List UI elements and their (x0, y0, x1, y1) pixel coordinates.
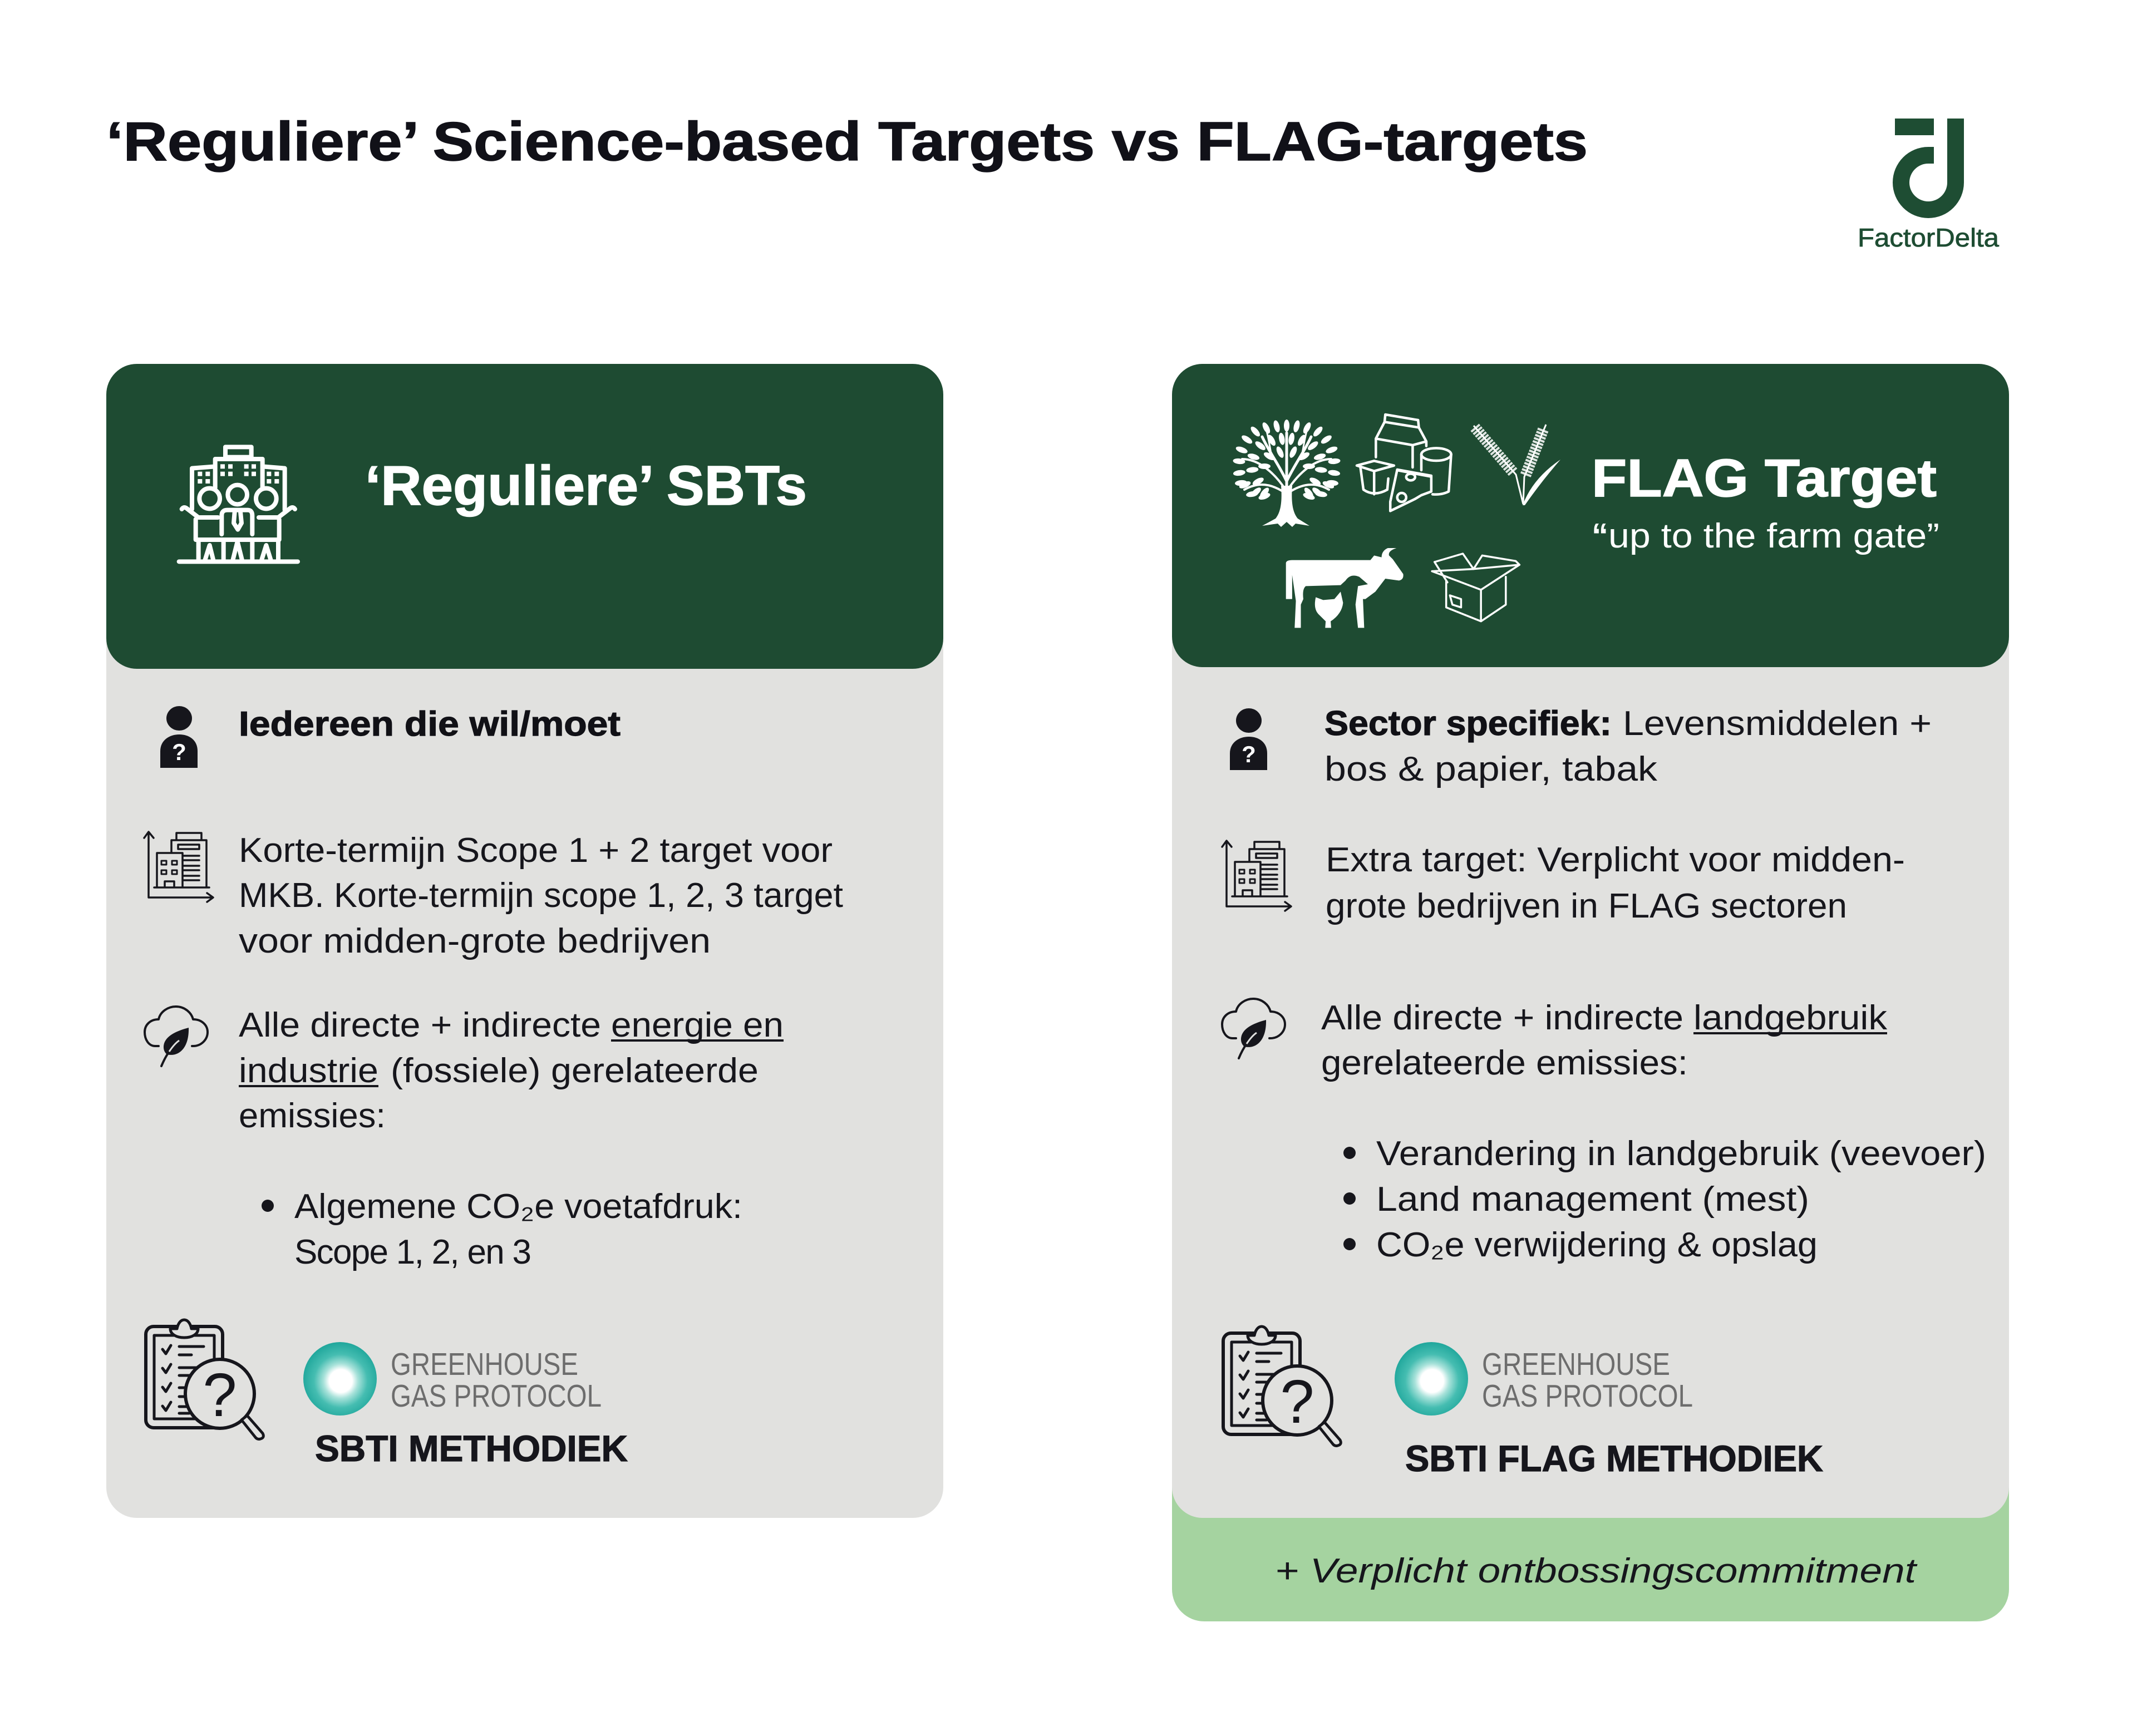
callout: deforestation commitment: + Verplicht ontbossingscommitment (1275, 1552, 1918, 1590)
icon: clipboard with magnifier: ? (203, 1361, 237, 1429)
text: who: Iedereen die wil/moet (239, 705, 621, 743)
icon: person with question mark (160, 706, 198, 768)
text: emissions: (fossiele) gerelateerde (391, 1052, 759, 1090)
text: methodology: SBTI METHODIEK (315, 1428, 628, 1469)
text: emissions: landgebruik (1693, 999, 1888, 1037)
icon: building chart (144, 832, 213, 902)
text: extra target: Extra target: Verplicht voor midden- (1326, 841, 1905, 879)
title: ‘Reguliere’ Science-based Targets vs FLAG-targets (106, 111, 1588, 172)
panel background (106, 612, 943, 1518)
logo: greenhouse gas protocol: GAS PROTOCOL (1482, 1378, 1693, 1414)
text: sector (1324, 704, 1932, 788)
icon: cloud with leaf (1222, 999, 1285, 1058)
panel heading: FLAG Target (1592, 448, 1937, 508)
text: emissions: energie en (611, 1006, 784, 1044)
logo: greenhouse gas protocol: GREENHOUSE (391, 1347, 578, 1382)
panel heading: up to the farm gate” (1608, 517, 1939, 555)
icon: cow and chicken (1286, 548, 1404, 628)
text: extra target: grote bedrijven in FLAG sectoren (1326, 887, 1847, 925)
icon: dairy products (1357, 415, 1451, 511)
icon: building with people (179, 447, 298, 561)
icon: person with question mark (1230, 708, 1267, 770)
text: target: voor midden-grote bedrijven (239, 922, 711, 960)
bullet list: Scope 1, 2, en 3 (294, 1233, 531, 1271)
icon: tree (1233, 420, 1341, 527)
logo: greenhouse gas protocol (303, 1342, 602, 1416)
panel heading: ‘Reguliere’ SBTs (365, 455, 807, 517)
text: sector: Sector specifiek: (1324, 704, 1612, 743)
panel: FLAG target (1172, 364, 2009, 1621)
icon: wheat (1474, 425, 1560, 505)
text: extra target (1326, 841, 1905, 925)
bullet list: Algemene CO₂e voetafdruk: (294, 1187, 742, 1226)
text: emissions (239, 1006, 784, 1135)
bullet list (262, 1187, 742, 1271)
logo: greenhouse gas protocol: GREENHOUSE (1482, 1347, 1670, 1382)
text: target: MKB. Korte-termijn scope 1, 2, 3 target (239, 876, 843, 915)
bullet list: Land management (mest) (1376, 1180, 1809, 1219)
panel heading: “ (1592, 517, 1608, 555)
icon: cardboard box (1432, 554, 1519, 622)
logo: greenhouse gas protocol: GAS PROTOCOL (391, 1378, 602, 1414)
text: target: Korte-termijn Scope 1 + 2 target voor (239, 831, 833, 870)
logo: greenhouse gas protocol (1395, 1342, 1693, 1416)
icon: person with question mark: ? (1242, 741, 1256, 767)
text: methodology: SBTI FLAG METHODIEK (1405, 1438, 1823, 1479)
bullet list (1343, 1135, 1986, 1264)
callout: deforestation commitment (1172, 1447, 2009, 1621)
bullet list: CO₂e verwijdering & opslag (1376, 1226, 1818, 1264)
icon: person with question mark: ? (172, 739, 186, 765)
text: emissions: Alle directe + indirecte (1321, 999, 1683, 1037)
text: sector: bos & papier, tabak (1324, 750, 1658, 788)
icon: clipboard with magnifier (1223, 1326, 1341, 1446)
logo: FactorDelta (1858, 119, 1999, 252)
logo: FactorDelta: FactorDelta (1858, 223, 1999, 252)
icon: clipboard with magnifier: ? (1280, 1368, 1314, 1436)
panel header (106, 364, 943, 669)
text: target (239, 831, 843, 960)
text: emissions (1321, 999, 1888, 1082)
icon: clipboard with magnifier (146, 1320, 263, 1439)
text: sector: Levensmiddelen + (1623, 704, 1932, 743)
text: emissions: Alle directe + indirecte (239, 1006, 601, 1044)
text: emissions: industrie (239, 1052, 378, 1090)
panel background (1172, 612, 2009, 1518)
bullet list: Verandering in landgebruik (veevoer) (1376, 1135, 1986, 1173)
icon: building chart (1222, 841, 1291, 911)
panel: reguliere SBTs (106, 364, 943, 1518)
text: emissions: gerelateerde emissies: (1321, 1044, 1688, 1082)
text: emissions: emissies: (239, 1097, 386, 1135)
panel heading (1592, 448, 1939, 555)
panel header (1172, 364, 2009, 667)
icon: cloud with leaf (145, 1007, 208, 1066)
